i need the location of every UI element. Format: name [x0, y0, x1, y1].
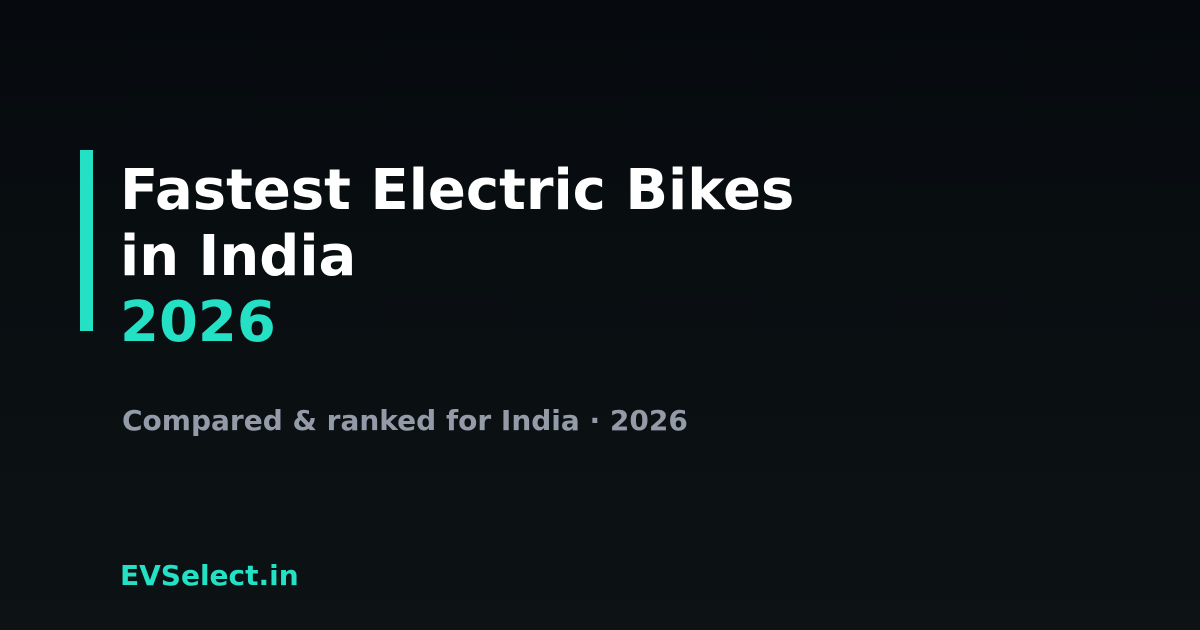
title [120, 158, 794, 355]
brand name: EVSelect.in [120, 559, 299, 592]
subtitle: Compared & ranked for India · 2026 [122, 404, 688, 437]
title: Fastest Electric Bikes [120, 158, 794, 223]
accent bar [80, 150, 93, 331]
title: in India [120, 224, 356, 289]
title: 2026 [120, 290, 276, 355]
